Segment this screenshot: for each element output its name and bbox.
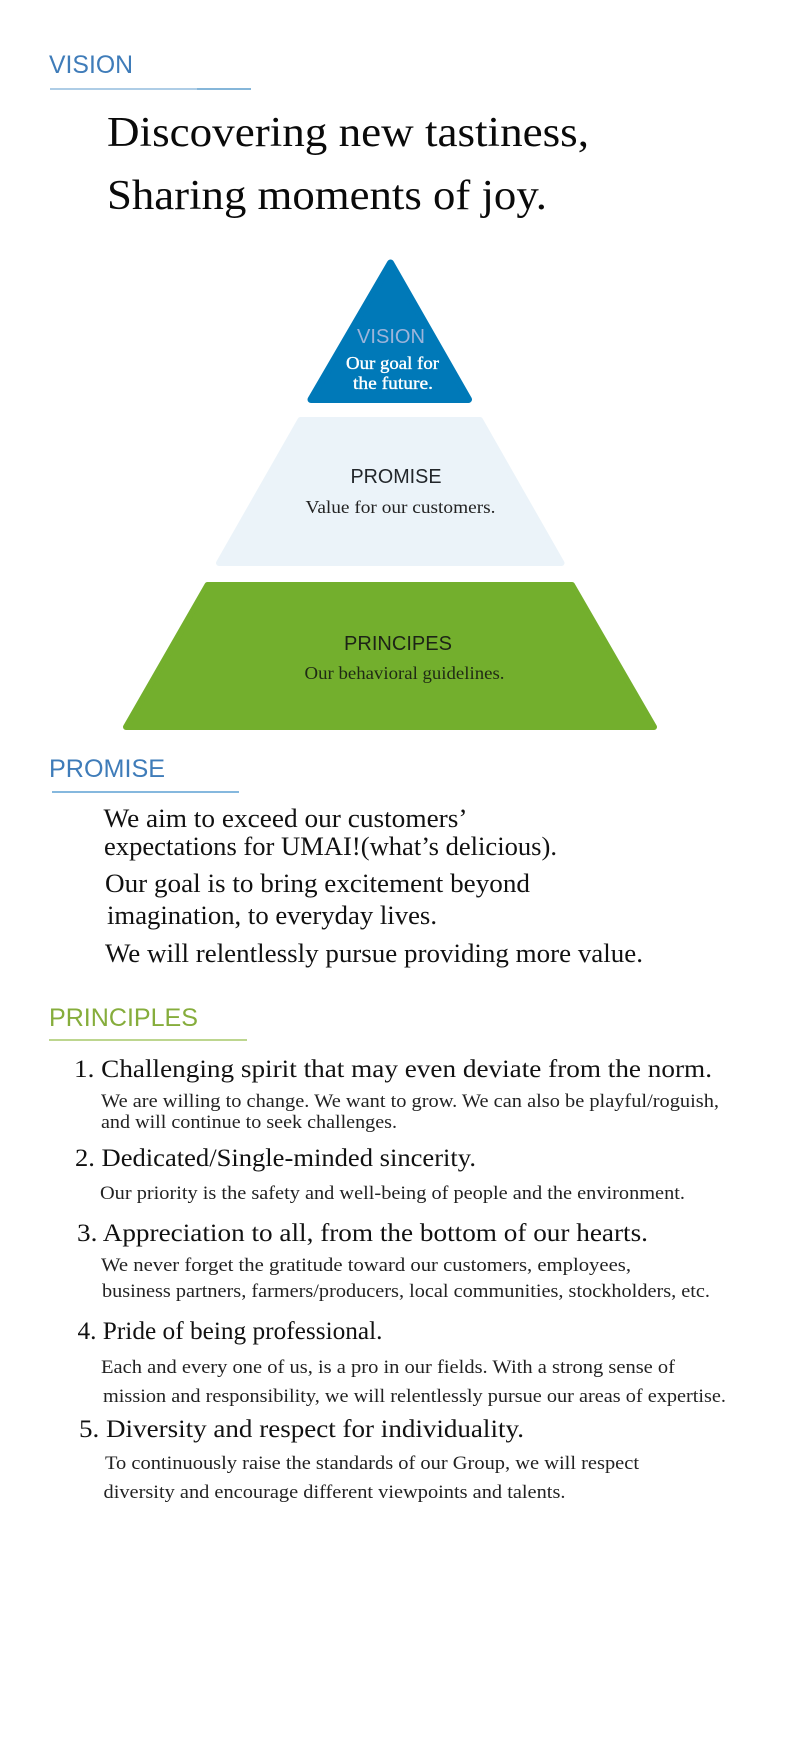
principle 1 (74, 1056, 719, 1133)
principle 1: 1. Challenging spirit that may even deviate from the norm. (74, 1056, 712, 1083)
pyramid tier: vision: Our goal for (346, 353, 439, 373)
pyramid tier: promise: PROMISE (350, 466, 442, 488)
principle 4: 4. Pride of being professional. (78, 1318, 382, 1345)
principle 4: mission and responsibility, we will relentlessly pursue our areas of expertise. (103, 1387, 726, 1407)
principle 5: 5. Diversity and respect for individuality. (79, 1416, 524, 1443)
pyramid diagram (126, 263, 654, 727)
pyramid tier: promise (219, 420, 562, 563)
principle 3: We never forget the gratitude toward our customers, employees, (101, 1256, 631, 1276)
principle 5: diversity and encourage different viewpoints and talents. (104, 1483, 566, 1503)
principle 1: and will continue to seek challenges. (101, 1113, 397, 1133)
principle 5: To continuously raise the standards of our Group, we will respect (105, 1454, 640, 1474)
pyramid tier: principles: PRINCIPES (344, 633, 452, 655)
heading: promise: PROMISE (49, 755, 165, 783)
pyramid tier: vision: the future. (353, 373, 433, 393)
title: vision statement: Sharing moments of joy. (107, 173, 547, 219)
heading: vision: VISION (49, 51, 133, 79)
principle 3 (77, 1220, 710, 1302)
principle 4 (78, 1318, 726, 1407)
pyramid tier: promise: Value for our customers. (306, 497, 496, 517)
principle 4: Each and every one of us, is a pro in our fields. With a strong sense of (101, 1358, 676, 1378)
text block: promise statement: imagination, to everyday lives. (107, 901, 437, 930)
title: vision statement: Discovering new tastiness, (107, 110, 589, 156)
pyramid tier: vision (311, 263, 468, 400)
principle 5 (79, 1416, 640, 1503)
text block: promise statement: Our goal is to bring excitement beyond (105, 869, 530, 898)
pyramid tier: principles (126, 585, 654, 727)
principle 3: business partners, farmers/producers, local communities, stockholders, etc. (102, 1282, 710, 1302)
principle 2: Our priority is the safety and well-being of people and the environment. (100, 1184, 685, 1204)
pyramid tier: vision: VISION (357, 326, 425, 348)
text block: promise statement: We aim to exceed our customers’ (104, 804, 468, 833)
text block: promise statement (104, 804, 643, 968)
title: vision statement (107, 110, 589, 219)
principle 2 (75, 1145, 685, 1204)
text block: promise statement: expectations for UMAI!(what’s delicious). (104, 832, 557, 861)
principle 1: We are willing to change. We want to grow. We can also be playful/roguish, (101, 1092, 719, 1112)
text block: promise statement: We will relentlessly pursue providing more value. (105, 939, 643, 968)
heading: principles: PRINCIPLES (49, 1004, 198, 1032)
principle 3: 3. Appreciation to all, from the bottom of our hearts. (77, 1220, 648, 1247)
pyramid tier: principles: Our behavioral guidelines. (304, 663, 504, 683)
principle 2: 2. Dedicated/Single-minded sincerity. (75, 1145, 476, 1172)
